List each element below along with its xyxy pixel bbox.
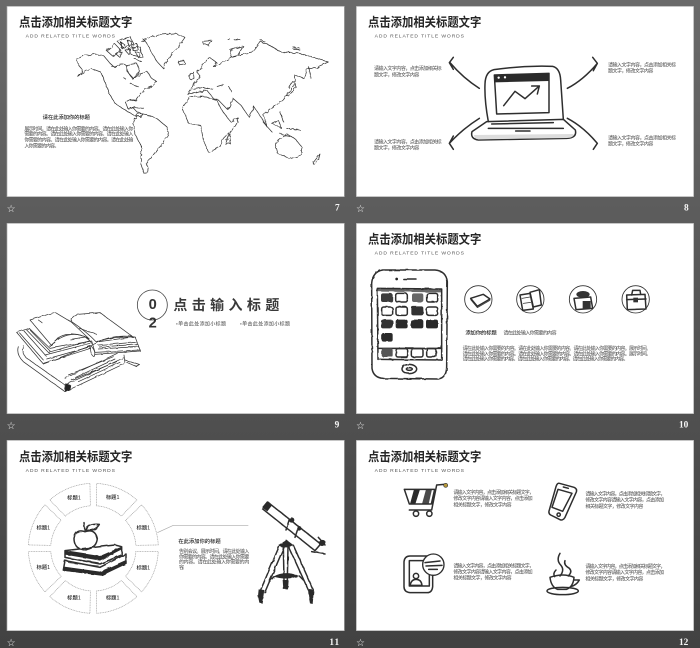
- icon: tilted phone: [549, 483, 577, 520]
- description body: 的内容。请在此处输入你需要的内: [179, 559, 249, 566]
- description body: [179, 548, 249, 571]
- icon: device in circle: [465, 286, 492, 313]
- page number: 9: [335, 421, 340, 431]
- icon: books in circle: [517, 286, 544, 313]
- map caption body: [24, 125, 133, 149]
- text: tablet: 修改文字内容请输入文字内容，点击添加: [453, 568, 533, 575]
- text: top left: 题文字，修改文字内容: [374, 72, 419, 79]
- icon: steaming coffee cup: [547, 553, 579, 595]
- subtitle: ADD RELATED TITLE WORDS: [375, 34, 465, 40]
- text: cup: 相关标题文字，修改文字内容: [585, 576, 643, 583]
- page number: 8: [684, 204, 689, 214]
- text: phone: 修改文字内容请输入文字内容，点击添加: [585, 497, 664, 504]
- text: phone: 相关标题文字，修改文字内容: [585, 503, 643, 510]
- footer star icon: ☆: [356, 204, 365, 215]
- ring diagram: 标题1: [106, 493, 120, 501]
- text: bottom right: 题文字，修改文字内容: [608, 141, 653, 148]
- arrow: bottom right: [567, 118, 597, 149]
- text block heading: [465, 329, 557, 337]
- ring diagram: 标题1: [37, 563, 50, 571]
- map caption body: 展示时间。请在此处输入你需要的内容。请在此处输入你: [24, 125, 133, 132]
- footer star icon: ☆: [7, 204, 16, 215]
- arrow: top right: [567, 57, 597, 88]
- number badge: 2: [149, 316, 157, 332]
- subheading right: •单击此处添加小标题: [240, 321, 290, 328]
- text: top left: [374, 65, 442, 79]
- arrow: bottom left: [449, 118, 479, 149]
- footer star icon: ☆: [356, 421, 365, 432]
- map caption body: 需要的内容。请在此处输入你需要的内容。请在此处输入: [24, 131, 133, 138]
- icon: briefcase in circle: [622, 286, 649, 313]
- icon: telescope on tripod: [258, 501, 325, 604]
- page number: 11: [329, 638, 340, 648]
- subtitle: ADD RELATED TITLE WORDS: [375, 251, 465, 257]
- title: 点击添加相关标题文字: [368, 14, 481, 29]
- text: tablet: [453, 562, 534, 581]
- footer star icon: ☆: [7, 421, 16, 432]
- description body: 你需要的内容。请在此处输入你需要: [179, 553, 249, 560]
- text: bottom right: [608, 135, 676, 148]
- icon: laptop with rising chart: [472, 66, 576, 140]
- text: phone: 请输入文字内容，点击添加相关标题文字，: [585, 490, 665, 497]
- text: top right: 题文字，修改文字内容: [608, 68, 653, 75]
- text: cart: [453, 489, 534, 509]
- title: 点击添加相关标题文字: [19, 449, 132, 464]
- map caption body: 你需要的内容。请在此处输入你需要的内容。请在此处输: [24, 136, 133, 143]
- text: tablet: 相关标题文字，修改文字内容: [453, 574, 512, 581]
- text: cup: 请输入文字内容，点击添加相关标题文字，: [585, 563, 665, 570]
- panel: slide 8 laptop: [356, 6, 694, 215]
- ring diagram: 标题1: [137, 523, 150, 531]
- text: bottom left: 请输入文字内容，点击添加相关标: [374, 138, 442, 145]
- text block heading: 添加你的标题: [465, 329, 497, 337]
- ring diagram: 标题1: [137, 563, 150, 571]
- text block body: 请在此处输入你需要的内容。请在此处输入你需要的内容。请在此处输入你需要的内容。展示时间。: [463, 350, 651, 357]
- description heading: 在此添加你的标题: [178, 537, 221, 545]
- text: cart: 修改文字内容请输入文字内容，点击添加: [453, 495, 533, 502]
- text: top left: 请输入文字内容，点击添加相关标: [374, 65, 442, 72]
- section heading: 点击输入标题: [173, 297, 279, 313]
- text: bottom left: 题文字，修改文字内容: [374, 144, 419, 151]
- text: top right: 请输入文字内容，点击添加相关标: [608, 62, 676, 69]
- description body: 容。: [179, 564, 187, 571]
- text: bottom left: [374, 138, 442, 151]
- icon: camera in circle: [569, 286, 597, 313]
- panel: slide 12 four icons: [356, 440, 694, 648]
- text block heading: 请在此处输入你需要的内容: [503, 329, 557, 336]
- subtitle: ADD RELATED TITLE WORDS: [375, 468, 465, 474]
- page number: 12: [679, 638, 689, 648]
- number badge: 0: [149, 297, 157, 313]
- panel: slide 9 section title: [7, 223, 344, 432]
- connector line: [157, 525, 248, 533]
- ring diagram: 标题1: [37, 523, 50, 531]
- ring diagram: 标题1: [106, 594, 120, 602]
- title: 点击添加相关标题文字: [368, 231, 481, 246]
- panel: slide 7 world map: [7, 6, 344, 215]
- icon: shopping cart: [404, 483, 448, 516]
- text: bottom right: 请输入文字内容，点击添加相关标: [608, 135, 676, 142]
- icon: open book on closed book: [17, 312, 140, 392]
- ring diagram: 标题1: [67, 494, 81, 502]
- text: phone: [585, 490, 665, 510]
- panel: slide 11 ring and telescope: [7, 440, 344, 648]
- number badge: [137, 290, 167, 332]
- subtitle: ADD RELATED TITLE WORDS: [26, 468, 116, 474]
- text block body: [463, 345, 651, 363]
- arrow: top left: [449, 57, 479, 88]
- text: cart: 相关标题文字，修改文字内容: [453, 502, 512, 509]
- page number: 10: [679, 421, 689, 431]
- page number: 7: [335, 204, 340, 214]
- text: top right: [608, 62, 676, 75]
- world map: [76, 33, 328, 173]
- text block body: 请在此处输入你需要的内容。请在此处输入你需要的内容。请在此处输入你需要的内容。: [463, 356, 628, 363]
- text: tablet: 请输入文字内容，点击添加相关标题文字，: [453, 562, 534, 569]
- ring diagram: 标题1: [67, 594, 81, 602]
- text block body: 请在此处输入你需要的内容。请在此处输入你需要的内容。请在此处输入你需要的内容。展示时间。: [463, 345, 651, 352]
- subheading left: •单击此处添加小标题: [176, 321, 226, 328]
- text: cup: 修改文字内容请输入文字内容，点击添加: [585, 569, 664, 576]
- title: 点击添加相关标题文字: [19, 14, 132, 29]
- ring diagram: [17, 472, 170, 625]
- text: cup: [585, 563, 665, 583]
- icon: smartphone: [372, 270, 447, 379]
- text: cart: 请输入文字内容，点击添加相关标题文字，: [453, 489, 534, 496]
- icon: tablet with chat bubble: [404, 554, 444, 593]
- title: 点击添加相关标题文字: [368, 449, 481, 464]
- map caption heading: 请在此添加你的标题: [43, 113, 91, 121]
- subtitle: ADD RELATED TITLE WORDS: [26, 34, 116, 40]
- description body: 告别会议。展示时间。请在此处输入: [179, 548, 249, 555]
- panel: slide 10 phone and icons: [356, 223, 694, 432]
- map caption body: 入你需要的内容。: [24, 142, 59, 149]
- icon: apple on books: [63, 523, 126, 575]
